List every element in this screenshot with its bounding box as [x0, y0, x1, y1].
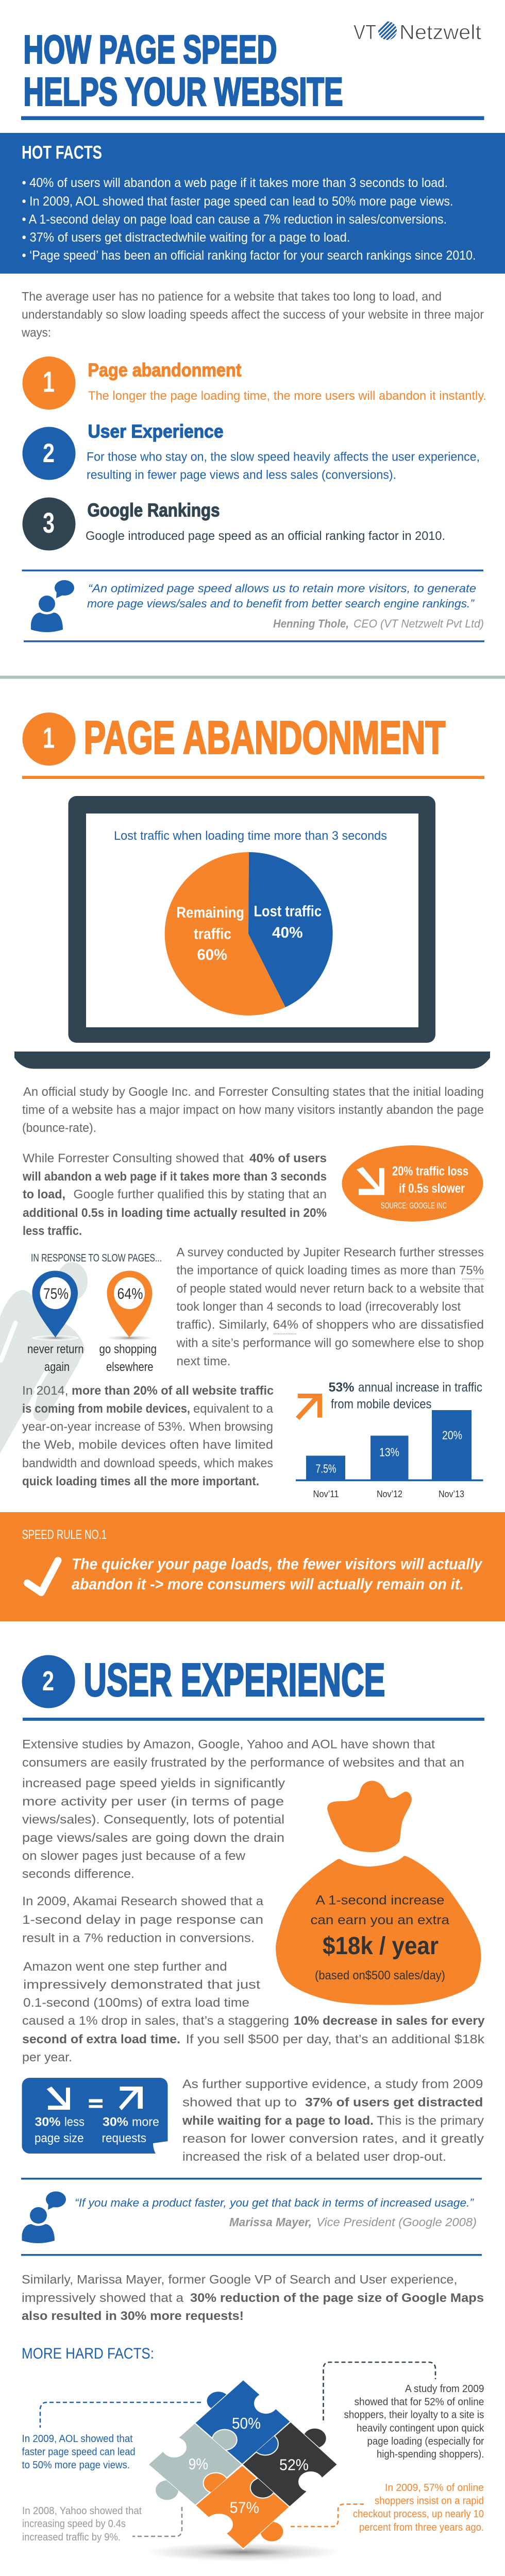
callout: 52% online shoppers: A study from 2009 — [405, 2383, 484, 2395]
callout: 52% online shoppers: high-spending shoppers). — [377, 2449, 484, 2460]
text: extensive studies: consumers are easily frustrated by the performance of websites and that an — [22, 1756, 464, 1770]
chart heading: 53% — [329, 1380, 355, 1395]
item 2: user experience: 2 — [43, 438, 55, 468]
puzzle values: 9% — [189, 2455, 208, 2473]
text: mobile traffic: equivalent to a — [193, 1402, 273, 1416]
icon: down arrow — [47, 2087, 70, 2110]
text: jupiter research survey: A survey conducted by Jupiter Research further stresses — [176, 1246, 484, 1259]
piece: gray 9% — [148, 2423, 242, 2505]
text: distraction study: reason for lower conversion rates, and it greatly — [182, 2132, 484, 2146]
icon: check mark — [27, 1561, 58, 1592]
quote: Henning Thole: “An optimized page speed allows us to retain more visitors, to generate — [88, 582, 476, 595]
callout: 20% traffic loss: if 0.5s slower — [399, 1181, 465, 1196]
text: amazon: If you sell $500 per day, that’s an additional $18k — [186, 2032, 485, 2046]
chart title: Lost traffic when loading time more than 3 seconds — [114, 829, 387, 843]
callout: Yahoo 9% — [22, 2505, 182, 2543]
text: forrester 40 percent: additional 0.5s in loading time actually resulted in 20% — [23, 1206, 327, 1220]
callout: 57% online shoppers — [291, 2482, 484, 2533]
item 1: page abandonment — [23, 357, 486, 410]
text: forrester 40 percent: Google further qualified this by stating that an — [73, 1188, 327, 1201]
text: marissa mayer google maps: also resulted in 30% more requests! — [22, 2309, 244, 2323]
text: amazon — [22, 1960, 485, 2064]
text: amazon: 0.1-second (100ms) of extra load time — [23, 1996, 249, 2010]
item 2: user experience: User Experience — [88, 420, 224, 442]
text: jupiter research survey: traffic). Similarly, 64% of shoppers who are dissatisfied — [176, 1318, 484, 1332]
chart heading: annual increase in traffic — [358, 1380, 482, 1395]
pie chart: Lost traffic — [254, 903, 322, 920]
pin: 75% never return again: 75% — [43, 1285, 69, 1302]
text: distraction study: As further supportive evidence, a study from 2009 — [182, 2077, 483, 2091]
banner: speed rule 1 — [0, 1512, 505, 1621]
puzzle values: 52% — [279, 2456, 309, 2474]
page curl — [153, 2141, 168, 2155]
axis labels — [313, 1488, 464, 1499]
pie chart: 40% — [272, 924, 303, 941]
callout: 20% traffic loss — [342, 1145, 483, 1222]
text: mobile traffic: bandwidth and download speeds, which makes — [22, 1456, 273, 1470]
facts list: • In 2009, AOL showed that faster page speed can lead to 50% more page views. — [22, 194, 453, 209]
callout: 20% traffic loss: 20% traffic loss — [392, 1164, 468, 1179]
intro text — [21, 290, 484, 340]
axis labels: Nov’12 — [377, 1488, 402, 1499]
text: forrester 40 percent — [22, 1151, 327, 1238]
facts list: • ‘Page speed’ has been an official ranking factor for your search rankings since 2010. — [22, 248, 476, 263]
section heading 2: user experience: 2 — [42, 1666, 54, 1697]
label: in response to slow pages: IN RESPONSE TO SLOW PAGES... — [31, 1252, 162, 1264]
callout: orange person $18k per year: can earn you an extra — [310, 1913, 449, 1927]
piece: orange 57% — [195, 2465, 290, 2549]
text: google and forrester study: An official study by Google Inc. and Forrester Consulting states that the initial loading — [23, 1085, 484, 1099]
text: mobile traffic: more than 20% of all website traffic — [72, 1384, 274, 1398]
pin: 64% go shopping elsewhere: 64% — [117, 1285, 143, 1302]
facts list: • 40% of users will abandon a web page if it takes more than 3 seconds to load. — [22, 176, 448, 190]
callout: Yahoo 9%: increasing speed by 0.4s — [22, 2518, 126, 2530]
text: mobile traffic — [22, 1384, 274, 1488]
text: marissa mayer google maps: impressively showed that a — [22, 2291, 183, 2305]
callout: Yahoo 9%: In 2008, Yahoo showed that — [22, 2505, 142, 2517]
text: google and forrester study: (bounce-rate). — [22, 1121, 96, 1135]
icon: speaker with speech bubble — [31, 580, 74, 632]
callout: 52% online shoppers: heavily contingent upon quick — [357, 2422, 484, 2434]
laptop base — [14, 1052, 490, 1069]
pin: 75% never return again: never return — [27, 1342, 83, 1356]
puzzle shadow — [145, 2543, 341, 2562]
bar values: 20% — [442, 1429, 462, 1442]
text: google and forrester study: time of a website has a major impact on how many visitors instantly abandon the page — [22, 1103, 484, 1117]
piece: blue 50% — [195, 2380, 291, 2465]
icon: down arrow — [357, 1167, 384, 1195]
text: mobile traffic: the Web, mobile devices often have limited — [22, 1438, 273, 1452]
logo: VT Netzwelt header: Netzwelt — [399, 21, 481, 44]
text: akamai research: result in a 7% reduction in conversions. — [22, 1931, 255, 1945]
quote: Marissa Mayer: “If you make a product faster, you get that back in terms of increased usage.” — [75, 2196, 475, 2209]
text: distraction study — [182, 2077, 484, 2164]
logo: VT Netzwelt header: VT — [354, 21, 376, 44]
text: distraction study: while waiting for a page to load. — [182, 2114, 374, 2128]
banner: speed rule 1: SPEED RULE NO.1 — [22, 1528, 107, 1542]
puzzle notches — [162, 2393, 323, 2535]
text: mobile traffic: In 2014, — [22, 1384, 68, 1398]
text: jupiter research survey: the importance of quick loading times as more than 75% — [176, 1264, 484, 1278]
panel: 30% less page size equals 30% more requests: requests — [102, 2131, 146, 2145]
text: extensive studies: more activity per user (in terms of page — [22, 1795, 284, 1808]
callout: AOL 50%: In 2009, AOL showed that — [22, 2433, 133, 2445]
panel: 30% less page size equals 30% more requests: 30% — [35, 2115, 61, 2129]
item 3: google rankings — [23, 498, 445, 550]
laptop screen — [68, 796, 435, 1043]
piece: dark 52% — [242, 2421, 338, 2507]
pin: 64% go shopping elsewhere — [99, 1270, 157, 1374]
text: amazon: per year. — [22, 2050, 72, 2064]
panel: 30% less page size equals 30% more requests: less — [64, 2115, 85, 2129]
text: forrester 40 percent: to load, — [23, 1188, 65, 1201]
quote: Henning Thole: more page views/sales and to benefit from better search engine rankings.” — [87, 597, 475, 610]
callout: orange person $18k per year — [276, 1781, 481, 2005]
text: amazon: impressively demonstrated that just — [23, 1978, 260, 1992]
text: extensive studies: views/sales). Consequently, lots of potential — [22, 1813, 284, 1827]
text: jupiter research survey — [176, 1246, 484, 1368]
item 1: page abandonment: Page abandonment — [88, 360, 241, 380]
item 3: google rankings: 3 — [43, 506, 55, 539]
item 1: page abandonment: The longer the page loading time, the more users will abandon it instantly. — [88, 389, 486, 403]
callout: AOL 50%: faster page speed can lead — [22, 2447, 135, 2458]
text: jupiter research survey: took longer than 4 seconds to load (irrecoverably lost — [176, 1300, 461, 1314]
callout: orange person $18k per year: A 1-second increase — [315, 1893, 444, 1908]
puzzle values: 57% — [230, 2499, 259, 2516]
item 1: page abandonment: 1 — [43, 366, 55, 399]
text: mobile traffic: quick loading times all the more important. — [22, 1475, 259, 1488]
pie chart — [165, 852, 333, 1015]
axis labels: Nov’11 — [313, 1488, 339, 1499]
item 3: google rankings: Google introduced page speed as an official ranking factor in 2010. — [86, 529, 445, 543]
text: distraction study: 37% of users get distracted — [305, 2096, 483, 2110]
text: extensive studies: increased page speed yields in significantly — [22, 1776, 285, 1790]
text: extensive studies: Extensive studies by Amazon, Google, Yahoo and AOL have shown that — [22, 1738, 435, 1752]
callout: AOL 50% — [22, 2402, 201, 2471]
quote: Marissa Mayer — [75, 2196, 477, 2229]
text: distraction study: This is the primary — [377, 2114, 484, 2128]
puzzle chart — [148, 2380, 338, 2549]
quote: Henning Thole: Henning Thole, — [273, 617, 349, 630]
callout: 52% online shoppers: showed that for 52% of online — [355, 2397, 484, 2408]
panel: 30% less page size equals 30% more requests: page size — [35, 2131, 83, 2145]
icon: up arrow — [296, 1394, 322, 1420]
heading: more hard facts: MORE HARD FACTS: — [22, 2345, 154, 2362]
text: google and forrester study — [22, 1085, 484, 1135]
person body — [276, 1856, 481, 2005]
callout: 52% online shoppers — [324, 2362, 484, 2460]
logo: VT Netzwelt header — [354, 22, 481, 40]
callout: 57% online shoppers: percent from three years ago. — [359, 2522, 484, 2533]
pin: 75% never return again: again — [44, 1360, 70, 1374]
icon: speaker with speech bubble — [22, 2192, 66, 2243]
chart heading — [329, 1380, 482, 1412]
bar chart: mobile traffic growth — [296, 1380, 483, 1499]
text: amazon: caused a 1% drop in sales, that’s a staggering — [22, 2014, 289, 2028]
text: extensive studies: page views/sales are going down the drain — [22, 1831, 284, 1845]
title: HELPS YOUR WEBSITE — [24, 70, 343, 114]
callout: AOL 50%: to 50% more page views. — [22, 2460, 130, 2471]
chart heading: from mobile devices — [331, 1397, 432, 1412]
pie chart: Remaining — [176, 904, 244, 921]
text: akamai research: 1-second delay in page response can — [22, 1913, 263, 1927]
callout: 57% online shoppers: In 2009, 57% of online — [385, 2482, 484, 2494]
background silhouette: running person — [0, 1262, 88, 1453]
title: HOW PAGE SPEED — [24, 28, 277, 72]
text: jupiter research survey: next time. — [176, 1354, 231, 1368]
text: marissa mayer google maps — [22, 2273, 484, 2323]
panel: hot facts — [0, 133, 505, 274]
quote: Marissa Mayer: Marissa Mayer, — [229, 2215, 312, 2229]
callout: orange person $18k per year: $18k / year — [323, 1933, 439, 1960]
puzzle tabs — [155, 2391, 327, 2542]
person head — [327, 1781, 412, 1852]
intro text: The average user has no patience for a website that takes too long to load, and — [22, 290, 442, 303]
heading: hot facts: HOT FACTS — [22, 142, 102, 163]
laptop with pie chart — [14, 796, 490, 1069]
text: amazon: second of extra load time. — [22, 2032, 180, 2046]
text: forrester 40 percent: will abandon a web page if it takes more than 3 seconds — [22, 1170, 327, 1183]
callout: 52% online shoppers: shoppers, their loyalty to a site is — [344, 2410, 484, 2421]
text: distraction study: showed that up to — [182, 2096, 297, 2110]
callout: 20% traffic loss: SOURCE: GOOGLE INC — [381, 1200, 447, 1211]
text: extensive studies: seconds difference. — [22, 1867, 134, 1881]
pie chart: 60% — [197, 946, 227, 963]
quote: Henning Thole: CEO (VT Netzwelt Pvt Ltd) — [354, 617, 484, 630]
text: jupiter research survey: of people stated would never return back to a website that — [176, 1282, 484, 1296]
text: forrester 40 percent: While Forrester Consulting showed that — [23, 1151, 244, 1165]
bars — [296, 1410, 483, 1481]
pin: 64% go shopping elsewhere: go shopping — [99, 1342, 157, 1356]
text: mobile traffic: is coming from mobile devices, — [22, 1402, 190, 1416]
text: forrester 40 percent: 40% of users — [249, 1151, 327, 1165]
facts list: • 37% of users get distractedwhile waiting for a page to load. — [22, 230, 350, 245]
bar values: 13% — [379, 1446, 399, 1459]
text: forrester 40 percent: less traffic. — [23, 1224, 82, 1238]
text: extensive studies: on slower pages just because of a few — [22, 1849, 245, 1863]
text: amazon: Amazon went one step further and — [23, 1960, 227, 1974]
quote: Marissa Mayer: Vice President (Google 2008) — [316, 2215, 477, 2229]
intro text: ways: — [21, 326, 51, 340]
text: akamai research: In 2009, Akamai Research showed that a — [22, 1894, 263, 1908]
puzzle values — [189, 2414, 309, 2516]
text: jupiter research survey: with a site’s performance will go somewhere else to shop — [176, 1336, 484, 1350]
panel: 30% less page size equals 30% more requests: 30% — [103, 2115, 128, 2129]
text: distraction study: increased the risk of a belated user drop-out. — [182, 2150, 446, 2164]
item 2: user experience: resulting in fewer page views and less sales (conversions). — [87, 468, 396, 482]
panel: 30% less page size equals 30% more requests — [22, 2078, 168, 2155]
section heading 1: page abandonment: 1 — [43, 721, 55, 754]
text: extensive studies — [22, 1738, 464, 1881]
icon: equals — [89, 2099, 103, 2108]
text: marissa mayer google maps: Similarly, Marissa Mayer, former Google VP of Search and User experience, — [22, 2273, 458, 2287]
bar values: 7.5% — [315, 1462, 336, 1476]
facts list — [22, 176, 476, 263]
callout: 52% online shoppers: page loading (especially for — [367, 2436, 484, 2447]
text: amazon: 10% decrease in sales for every — [294, 2014, 485, 2028]
intro text: understandably so slow loading speeds affect the success of your website in three major — [22, 308, 484, 322]
item 2: user experience: For those who stay on, the slow speed heavily affects the user experience, — [87, 450, 480, 464]
bar values — [315, 1429, 462, 1476]
callout: Yahoo 9%: increased traffic by 9%. — [22, 2532, 121, 2543]
text: akamai research — [22, 1894, 263, 1945]
title — [24, 28, 343, 114]
icon: up arrow — [119, 2087, 143, 2110]
pin: 64% go shopping elsewhere: elsewhere — [106, 1360, 154, 1374]
section heading 2: user experience — [22, 1655, 385, 1708]
pin: 75% never return again — [27, 1270, 83, 1374]
callout: 57% online shoppers: shoppers insist on a rapid — [375, 2496, 484, 2507]
item 2: user experience — [23, 420, 480, 482]
axis labels: Nov’13 — [439, 1488, 464, 1499]
callout: 57% online shoppers: checkout process, up nearly 10 — [353, 2509, 484, 2520]
facts list: • A 1-second delay on page load can cause a 7% reduction in sales/conversions. — [22, 212, 447, 227]
callout: orange person $18k per year: (based on$500 sales/day) — [315, 1969, 445, 1982]
panel: 30% less page size equals 30% more requests: more — [132, 2115, 159, 2129]
text: mobile traffic: year-on-year increase of 53%. When browsing — [22, 1420, 273, 1434]
text: marissa mayer google maps: 30% reduction of the page size of Google Maps — [190, 2291, 484, 2305]
pie chart: traffic — [194, 926, 231, 943]
item 3: google rankings: Google Rankings — [88, 500, 220, 520]
quote: Henning Thole — [87, 582, 484, 630]
puzzle values: 50% — [232, 2414, 261, 2432]
banner: speed rule 1: abandon it -> more consumers will actually remain on it. — [72, 1575, 464, 1593]
